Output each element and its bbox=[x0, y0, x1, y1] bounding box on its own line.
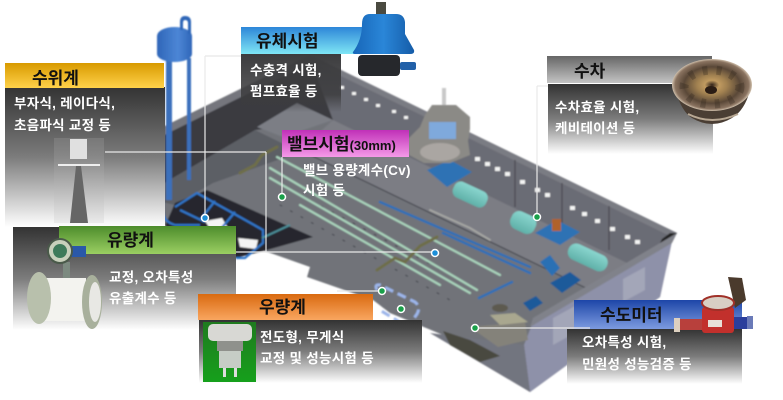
text: 유량계 설명: 교정, 오차특성 bbox=[109, 270, 193, 285]
equipment: teal tanks and platforms bbox=[427, 160, 610, 311]
text: 수차 설명: 수차효율 시험, bbox=[555, 100, 639, 115]
building: test facility cutaway bbox=[130, 16, 677, 392]
olive braces across pipes bbox=[240, 147, 437, 270]
wall pillars bbox=[515, 160, 609, 250]
left dark wall bbox=[132, 58, 333, 195]
heading: 수위계: 수위계 bbox=[32, 69, 79, 88]
markers: green and blue dots bbox=[202, 194, 540, 332]
panel: 밸브시험 bbox=[282, 130, 411, 198]
panel: 우량계 bbox=[198, 294, 422, 383]
heading: 밸브시험: 밸브시험(30mm) bbox=[287, 135, 396, 154]
heading: 수차: 수차 bbox=[574, 62, 606, 81]
icon: 수도 계량기 bbox=[674, 277, 753, 333]
text: 밸브시험 설명: 밸브 용량계수(Cv) bbox=[303, 163, 411, 178]
text: 수위계 설명: 초음파식 교정 등 bbox=[14, 118, 111, 133]
icon: 전자 유량계 bbox=[27, 239, 102, 329]
leader lines bbox=[105, 56, 590, 328]
back platform floor bbox=[300, 120, 627, 290]
heading: 수차 bbox=[547, 56, 712, 83]
heading: 수위계 bbox=[5, 63, 164, 88]
icon: 레이더 수위계 bbox=[54, 138, 104, 223]
text: 우량계 설명: 전도형, 무게식 bbox=[260, 330, 344, 345]
rain gauge test area dashed outline bbox=[376, 285, 419, 327]
panel: 유체시험 bbox=[241, 2, 416, 112]
panel: 수위계 bbox=[5, 63, 165, 227]
panel: 수도미터 bbox=[567, 277, 753, 384]
back wall bbox=[310, 55, 677, 263]
icon: 블루 펌프 bbox=[353, 2, 416, 76]
outer side wall bbox=[524, 241, 672, 392]
building outer hull bbox=[130, 55, 677, 392]
back wall windows bbox=[340, 86, 640, 244]
text: 유량계 설명: 유출계수 등 bbox=[109, 291, 177, 306]
text: 밸브시험 설명: 시험 등 bbox=[303, 183, 345, 198]
heading: 유체시험: 유체시험 bbox=[256, 32, 319, 51]
text: 수도미터 설명: 오차특성 시험, bbox=[582, 335, 666, 350]
heading: 유체시험 bbox=[241, 27, 366, 54]
blue surge tower bbox=[157, 16, 192, 200]
heading: 수도미터: 수도미터 bbox=[600, 306, 663, 325]
heading: 유량계: 유량계 bbox=[107, 231, 154, 250]
heading: 우량계 bbox=[198, 294, 373, 320]
text: 유체시험 설명: 수충격 시험, bbox=[250, 63, 322, 78]
heading: 우량계: 우량계 bbox=[259, 298, 306, 317]
panel: 수차 bbox=[547, 56, 752, 154]
icon: 수차 러너 bbox=[672, 59, 752, 124]
text: 수위계 설명: 부자식, 레이다식, bbox=[14, 96, 115, 111]
heading: 수도미터 bbox=[574, 300, 742, 329]
pit equipment near bottom bbox=[443, 304, 528, 362]
long test pipes bbox=[240, 147, 530, 300]
pit with blue pipes bbox=[163, 190, 313, 258]
heading: 유량계 bbox=[59, 226, 236, 254]
text: 우량계 설명: 교정 및 성능시험 등 bbox=[260, 351, 374, 366]
text: 유체시험 설명: 펌프효율 등 bbox=[250, 84, 318, 99]
text: 수차 설명: 케비테이션 등 bbox=[555, 121, 635, 136]
icon: 우량계 기기 bbox=[203, 322, 256, 382]
text: 수도미터 설명: 민원성 성능검증 등 bbox=[582, 357, 692, 372]
panel: 유량계 bbox=[13, 226, 236, 330]
valve apparatus bbox=[408, 88, 470, 163]
end wall rim bbox=[530, 233, 677, 327]
